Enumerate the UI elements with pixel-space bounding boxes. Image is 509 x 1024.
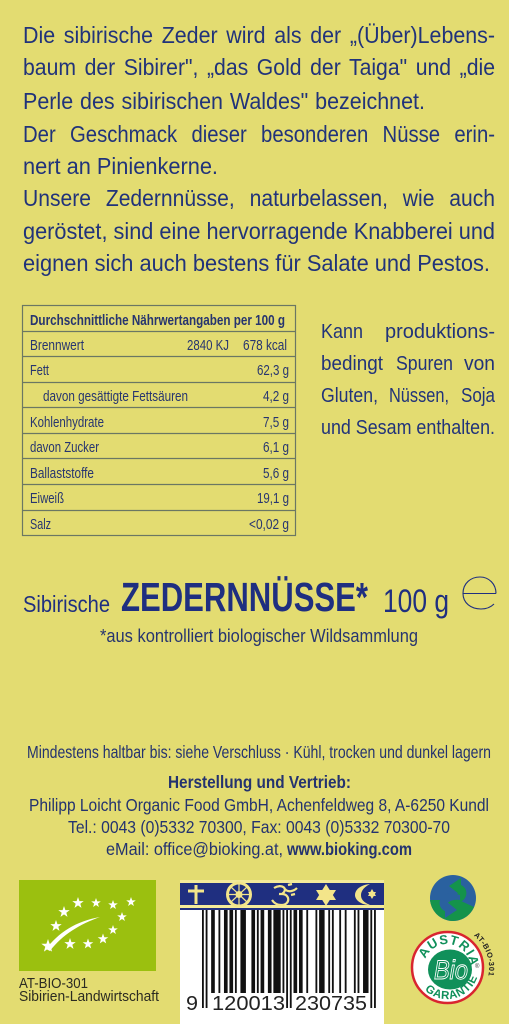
icon: cross <box>188 885 204 904</box>
icon: crescent and star <box>355 884 376 905</box>
barcode digits: 120013 <box>212 993 285 1015</box>
row: Fett: Fett <box>30 363 49 379</box>
product name line: 100 g <box>383 583 449 619</box>
row: Eiweiß: 19,1 g <box>257 491 289 507</box>
allergen note: Spuren <box>396 352 453 375</box>
Austria Bio Garantie seal: ® <box>475 963 480 970</box>
certification code text: AT-BIO-301 <box>19 975 88 992</box>
manufacturer details <box>29 772 489 859</box>
row: Ballaststoffe: Ballaststoffe <box>30 466 94 482</box>
Austria Bio Garantie seal: AUSTRIA <box>420 935 478 965</box>
row: Fett <box>30 363 289 379</box>
allergen note: produktions- <box>385 320 495 343</box>
row: Kohlenhydrate <box>30 415 289 431</box>
product name line: Sibirische <box>23 591 110 617</box>
symbol band <box>180 880 384 910</box>
manufacturer details: Herstellung und Vertrieb: <box>168 772 351 792</box>
barcode digits: 230735 <box>295 993 367 1015</box>
row: Kohlenhydrate: Kohlenhydrate <box>30 415 104 431</box>
certification code text: Sibirien-Landwirtschaft <box>19 988 160 1005</box>
barcode digits <box>186 993 367 1015</box>
icon: star of david <box>316 884 336 906</box>
icon: dharma wheel <box>228 883 250 906</box>
description text block: nert an Pinienkerne. <box>23 153 218 179</box>
manufacturer details: eMail: office@bioking.at, <box>106 839 283 859</box>
icon: om symbol <box>272 884 297 905</box>
allergen note: Gluten, <box>321 384 378 407</box>
allergen note: von <box>464 352 495 375</box>
organic footnote: *aus kontrolliert biologischer Wildsammlung <box>100 626 418 646</box>
row: Ballaststoffe <box>30 466 289 482</box>
row: Zucker <box>30 440 289 456</box>
certification code text <box>19 975 160 1005</box>
barcode label <box>180 880 384 1024</box>
description text block <box>23 22 495 276</box>
Austria Bio Garantie seal <box>410 930 494 1004</box>
row: Ballaststoffe: 5,6 g <box>263 466 289 482</box>
allergen note <box>321 320 495 439</box>
nutrition table <box>22 306 296 536</box>
row: Zucker: davon Zucker <box>30 440 99 456</box>
row: Salz <box>30 517 289 533</box>
product name line: ZEDERNNÜSSE* <box>121 574 368 620</box>
row: gesättigte Fettsäuren: 4,2 g <box>263 389 289 405</box>
row: Brennwert: 2840 KJ <box>187 338 229 354</box>
icon: estimated e mark <box>463 577 496 609</box>
row: gesättigte Fettsäuren: davon gesättigte Fettsäuren <box>43 389 188 405</box>
row: Brennwert <box>30 338 287 354</box>
manufacturer details: Tel.: 0043 (0)5332 70300, Fax: 0043 (0)5332 70300-70 <box>68 817 450 837</box>
Austria Bio Garantie seal: Bio <box>434 955 468 985</box>
row: Eiweiß: Eiweiß <box>30 491 64 507</box>
allergen note: Kann <box>321 320 363 343</box>
EU organic logo <box>19 880 156 971</box>
icon: green dot recycling logo <box>430 875 476 921</box>
table heading: Durchschnittliche Nährwertangaben per 100 g <box>30 313 285 329</box>
row: Salz: <0,02 g <box>249 517 289 533</box>
barcode bars <box>202 910 376 1008</box>
row: Eiweiß <box>30 491 289 507</box>
allergen note: Nüssen, <box>389 384 449 407</box>
Austria Bio Garantie seal: GARANTIE <box>426 975 478 1000</box>
row: Salz: Salz <box>30 517 51 533</box>
row: Fett: 62,3 g <box>257 363 289 379</box>
Austria Bio Garantie seal: AT-BIO-301 <box>474 933 494 976</box>
row: Brennwert: Brennwert <box>30 338 84 354</box>
description text block: Perle des sibirischen Waldes" bezeichnet. <box>23 88 425 114</box>
allergen note: bedingt <box>321 352 383 375</box>
row: Zucker: 6,1 g <box>263 440 289 456</box>
row: Brennwert: 678 kcal <box>243 338 287 354</box>
allergen note: Soja <box>461 384 495 407</box>
barcode digits: 9 <box>186 993 198 1015</box>
manufacturer details: www.bioking.com <box>286 839 412 859</box>
row: Kohlenhydrate: 7,5 g <box>263 415 289 431</box>
